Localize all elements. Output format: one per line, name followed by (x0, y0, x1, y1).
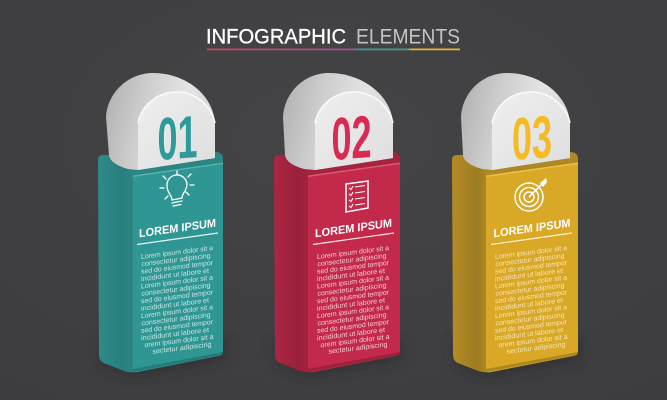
heading: LOREM IPSUM (139, 218, 216, 240)
body text: Lorem ipsum dolor sit a (495, 245, 567, 261)
title: ELEMENTS (356, 26, 460, 48)
title: INFOGRAPHIC (206, 26, 346, 48)
body text: Lorem ipsum dolor sit a (317, 304, 389, 320)
body text: Lorem ipsum dolor sit a (317, 245, 389, 261)
body text: incididunt ut labore et (495, 297, 563, 313)
title (206, 26, 460, 50)
body text: incididunt ut labore et (317, 268, 385, 283)
cap (283, 73, 393, 170)
icon: checklist (346, 181, 368, 212)
red box body (274, 152, 400, 372)
body text: consectetur adipiscing (318, 253, 387, 268)
heading: LOREM IPSUM (315, 218, 392, 240)
body text (317, 245, 390, 357)
divider (313, 233, 394, 244)
body text (495, 245, 568, 357)
body text: sectetur adipiscing (506, 341, 566, 356)
icon: target with arrow (515, 178, 547, 211)
body text: sed do eiusmod tempor (317, 289, 390, 305)
panel: step 02 (274, 73, 402, 376)
number 02: 02 (332, 104, 372, 173)
body text: sectetur adipiscing (328, 341, 388, 356)
panel: step 03 (452, 73, 580, 376)
body text: consectetur adipiscing (318, 282, 387, 298)
teal box body (98, 152, 223, 372)
body text: incididunt ut labore et (495, 327, 563, 342)
body text: consectetur adipiscing (496, 282, 565, 298)
body text: sed do eiusmod tempor (141, 319, 214, 335)
yellow box body (452, 152, 578, 372)
body text: incididunt ut labore et (495, 268, 563, 283)
divider (137, 233, 218, 244)
number 03: 03 (512, 104, 552, 173)
body text: Lorem ipsum dolor sit a (317, 275, 389, 291)
body text: orem ipsum dolor sit a (498, 334, 568, 349)
body text: Lorem ipsum dolor sit a (495, 275, 567, 291)
body text: sed do eiusmod tempor (141, 260, 214, 276)
body text: consectetur adipiscing (142, 253, 211, 268)
body text: incididunt ut labore et (141, 327, 209, 342)
body text: sed do eiusmod tempor (495, 260, 568, 276)
body text: Lorem ipsum dolor sit a (141, 275, 213, 291)
heading: LOREM IPSUM (494, 218, 570, 240)
divider (491, 233, 572, 244)
panel: step 01 (98, 73, 226, 376)
body text: Lorem ipsum dolor sit a (495, 304, 567, 320)
body text: sed do eiusmod tempor (495, 319, 568, 335)
number 01: 01 (158, 104, 198, 173)
body text: consectetur adipiscing (496, 312, 565, 328)
body text: sed do eiusmod tempor (141, 289, 214, 305)
body text: sectetur adipiscing (152, 341, 212, 356)
cap (461, 73, 570, 170)
body text: consectetur adipiscing (142, 312, 211, 328)
body text: consectetur adipiscing (496, 253, 565, 268)
body text: orem ipsum dolor sit a (320, 334, 390, 349)
body text: incididunt ut labore et (141, 268, 209, 283)
body text: incididunt ut labore et (317, 297, 385, 313)
body text: Lorem ipsum dolor sit a (141, 304, 213, 320)
body text: consectetur adipiscing (318, 312, 387, 328)
body text: incididunt ut labore et (141, 297, 209, 313)
body text: incididunt ut labore et (317, 327, 385, 342)
body text: consectetur adipiscing (142, 282, 211, 298)
cap (106, 73, 215, 170)
body text: sed do eiusmod tempor (317, 319, 390, 335)
icon: light bulb (160, 171, 194, 206)
body text (141, 245, 214, 357)
body text: Lorem ipsum dolor sit a (141, 245, 213, 261)
body text: orem ipsum dolor sit a (144, 334, 214, 349)
body text: sed do eiusmod tempor (495, 289, 568, 305)
body text: sed do eiusmod tempor (317, 260, 390, 276)
